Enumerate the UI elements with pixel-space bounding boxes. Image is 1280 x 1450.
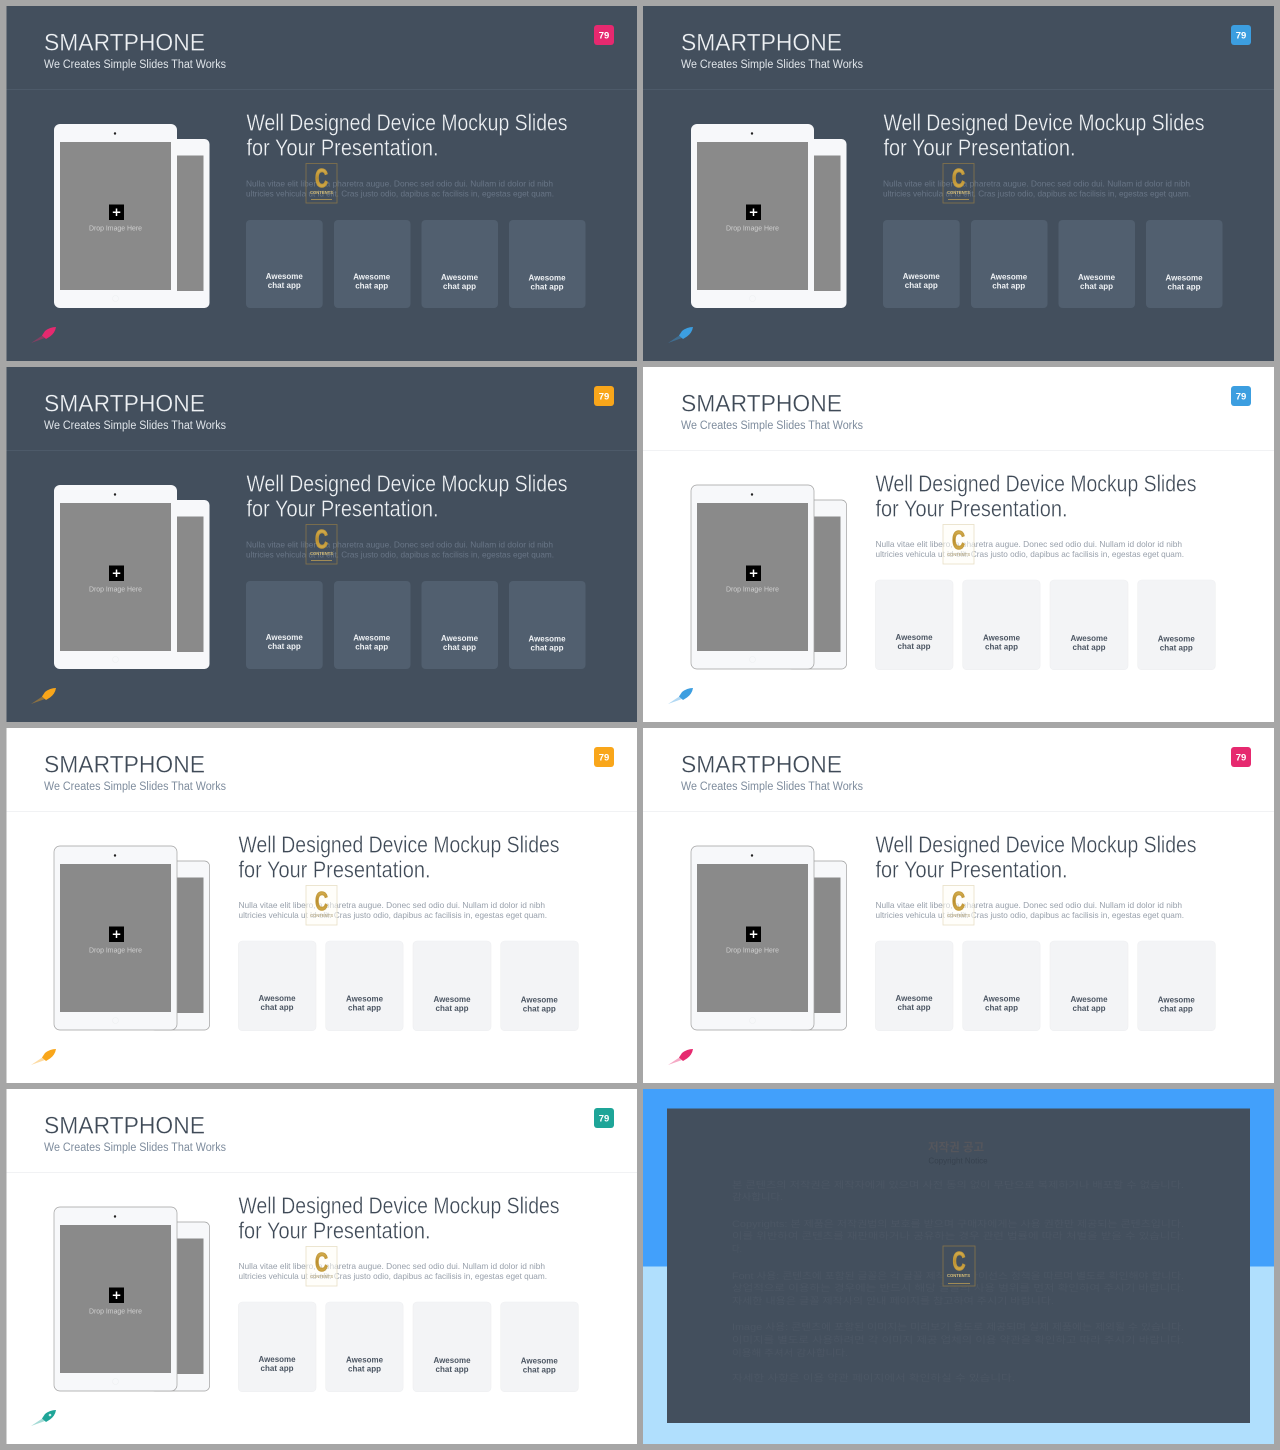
app cards: Awesome — [521, 1355, 558, 1365]
watermark logo: CONTENTS — [310, 913, 333, 918]
app cards: chat app — [436, 1364, 468, 1374]
app cards: Awesome — [434, 1355, 471, 1365]
watermark logo — [943, 1246, 975, 1286]
watermark logo — [943, 163, 974, 203]
app cards: chat app — [530, 642, 564, 652]
slide title: SMARTPHONE — [681, 390, 842, 417]
app cards: Awesome — [990, 272, 1027, 282]
body text: ultricies vehicula ut id elit. Cras justo odio, dapibus ac facilisis in, egestas eget quam. — [876, 549, 1184, 559]
app cards: chat app — [1072, 642, 1106, 652]
watermark logo: CONTENTS — [947, 552, 970, 557]
app cards: chat app — [268, 641, 301, 651]
watermark logo — [306, 1246, 337, 1286]
app cards: chat app — [1160, 642, 1193, 652]
app cards: chat app — [1168, 281, 1200, 291]
panel: dark slide pink — [6, 6, 637, 361]
tablet mockup: Drop Image Here — [89, 948, 142, 954]
panel: light slide teal — [6, 1089, 637, 1444]
panel: dark slide blue — [643, 6, 1274, 361]
body text: ultricies vehicula ut id elit. Cras justo odio, dapibus ac facilisis in, egestas eget quam. — [883, 189, 1191, 199]
app cards: chat app — [985, 1002, 1018, 1012]
heading: Well Designed Device Mockup Slides — [238, 1193, 560, 1219]
slide subtitle: We Creates Simple Slides That Works — [44, 1142, 226, 1154]
app cards: chat app — [523, 1364, 556, 1374]
heading: Well Designed Device Mockup Slides — [246, 110, 568, 136]
notice paragraphs: Image 사용: 콘텐츠에 포함된 이미지는 미리보기 용도로 제공되며 실제 제품에는 제외될 수 있습니다. — [732, 1321, 1184, 1332]
watermark logo — [306, 524, 337, 564]
heading: for Your Presentation. — [238, 1218, 430, 1244]
heading — [238, 1193, 560, 1244]
slide subtitle: We Creates Simple Slides That Works — [681, 59, 863, 71]
icon: rocket — [668, 1049, 693, 1065]
app cards: Awesome — [353, 272, 390, 282]
notice paragraphs: Copyrights: 본 제품은 저작권법의 보호를 받으며 구매자에게는 사용 권한만 제공되는 콘텐츠입니다. — [732, 1218, 1184, 1229]
app cards: chat app — [355, 280, 388, 290]
body text: ultricies vehicula ut id elit. Cras justo odio, dapibus ac facilisis in, egestas eget quam. — [246, 189, 554, 199]
app cards: Awesome — [346, 1354, 383, 1364]
app cards: chat app — [1160, 1003, 1193, 1013]
app cards: Awesome — [1070, 633, 1108, 643]
body text: Nulla vitae elit libero, a pharetra augue. Donec sed odio dui. Nullam id dolor id nibh — [876, 539, 1182, 549]
app cards: Awesome — [434, 994, 471, 1004]
body text: Nulla vitae elit libero, a pharetra augue. Donec sed odio dui. Nullam id dolor id nibh — [238, 900, 545, 910]
app cards: Awesome — [528, 633, 566, 643]
app cards: Awesome — [258, 993, 296, 1003]
body text — [246, 540, 554, 560]
heading — [246, 110, 568, 161]
heading — [884, 110, 1204, 161]
slide subtitle: We Creates Simple Slides That Works — [44, 420, 226, 432]
app cards: Awesome — [266, 632, 303, 642]
page badge — [594, 386, 614, 406]
watermark logo: C — [315, 1247, 328, 1277]
page badge: 79 — [1236, 30, 1246, 42]
app cards: chat app — [898, 641, 930, 651]
watermark logo: C — [315, 163, 328, 193]
app cards: Awesome — [353, 632, 390, 642]
icon: rocket — [31, 1410, 56, 1426]
app cards: chat app — [443, 642, 476, 652]
app cards — [246, 220, 586, 308]
tablet mockup — [54, 1207, 210, 1391]
panel: light slide blue — [643, 367, 1274, 722]
tablet mockup — [54, 846, 210, 1030]
page badge: 79 — [599, 30, 609, 42]
body text: ultricies vehicula ut id elit. Cras justo odio, dapibus ac facilisis in, egestas eget quam. — [246, 550, 554, 560]
heading: Well Designed Device Mockup Slides — [884, 110, 1204, 136]
app cards: Awesome — [1158, 994, 1195, 1004]
watermark logo — [943, 524, 974, 564]
notice paragraphs — [732, 1179, 1184, 1383]
watermark logo: C — [315, 524, 328, 554]
body text: Nulla vitae elit libero, a pharetra augue. Donec sed odio dui. Nullam id dolor id nibh — [246, 540, 553, 550]
tablet mockup: Drop Image Here — [726, 226, 779, 232]
tablet mockup: Drop Image Here — [726, 948, 779, 954]
page badge — [594, 747, 614, 767]
slide title: SMARTPHONE — [44, 29, 205, 56]
heading: Well Designed Device Mockup Slides — [876, 471, 1196, 497]
heading — [238, 832, 560, 883]
notice paragraphs: 자세한 사항은 이용 약관 페이지에서 확인하실 수 있습니다. — [732, 1372, 1015, 1383]
page badge: 79 — [1236, 392, 1246, 402]
notice paragraphs: 이를 위반하여 콘텐츠를 재판매하거나 공유하는 경우 관련 법률에 따라 처벌을 받을 수 있습니다. — [732, 1230, 1184, 1241]
heading — [876, 471, 1196, 522]
heading: for Your Presentation. — [884, 135, 1076, 161]
app cards — [883, 220, 1222, 308]
icon: rocket — [31, 1049, 56, 1065]
app cards: chat app — [1072, 1003, 1106, 1013]
watermark logo: CONTENTS — [310, 1274, 333, 1279]
body text: Nulla vitae elit libero, a pharetra augue. Donec sed odio dui. Nullam id dolor id nibh — [238, 1261, 545, 1271]
slide subtitle: We Creates Simple Slides That Works — [681, 420, 863, 432]
tablet mockup — [54, 124, 210, 308]
heading: Well Designed Device Mockup Slides — [246, 471, 568, 497]
app cards: Awesome — [896, 632, 933, 642]
notice title: 저작권 공고 — [928, 1140, 984, 1154]
slide subtitle: We Creates Simple Slides That Works — [681, 781, 863, 793]
page badge — [1231, 386, 1251, 406]
heading: for Your Presentation. — [876, 857, 1068, 883]
notice paragraphs: 이미지를 별도로 사용하려면 각 이미지 제공 업체의 이용 약관을 확인하고 따라 주시기 바랍니다. — [732, 1334, 1184, 1345]
panel: dark slide orange — [6, 367, 637, 722]
page badge — [1231, 747, 1251, 767]
watermark logo — [306, 163, 337, 203]
slide title: SMARTPHONE — [44, 1112, 205, 1139]
watermark logo: CONTENTS — [947, 190, 970, 195]
page badge: 79 — [599, 392, 609, 402]
icon: rocket — [668, 688, 693, 704]
notice paragraphs: 자세한 내용은 글꼴 제작사의 안내 페이지를 참고하여 주시기 바랍니다. — [732, 1295, 1054, 1306]
app cards: Awesome — [1166, 272, 1203, 282]
app cards: Awesome — [521, 994, 558, 1004]
tablet mockup: Drop Image Here — [89, 586, 142, 594]
page badge: 79 — [599, 1114, 609, 1124]
app cards: Awesome — [258, 1354, 296, 1364]
notice paragraphs: 다. — [732, 1244, 742, 1254]
tablet mockup — [691, 124, 846, 308]
slide title: SMARTPHONE — [44, 390, 205, 417]
app cards: Awesome — [441, 272, 478, 282]
app cards: chat app — [898, 1002, 930, 1012]
app cards: Awesome — [1070, 994, 1108, 1004]
app cards: chat app — [905, 280, 938, 290]
app cards — [238, 1302, 578, 1392]
page badge — [1231, 25, 1251, 45]
app cards: Awesome — [528, 272, 566, 282]
app cards: chat app — [260, 1363, 294, 1373]
app cards: Awesome — [346, 994, 383, 1004]
body text: Nulla vitae elit libero, a pharetra augue. Donec sed odio dui. Nullam id dolor id nibh — [876, 900, 1182, 910]
notice paragraphs: 상업적으로 이용하는 경우에는 반드시 해당 글꼴의 사용 범위를 먼저 확인하여 주시기 바랍니다. — [732, 1282, 1184, 1293]
body text — [238, 900, 547, 920]
slide subtitle: We Creates Simple Slides That Works — [44, 781, 226, 793]
heading: for Your Presentation. — [246, 496, 438, 522]
page badge: 79 — [599, 752, 609, 764]
body text: Nulla vitae elit libero, a pharetra augue. Donec sed odio dui. Nullam id dolor id nibh — [883, 179, 1190, 189]
body text — [876, 900, 1184, 920]
heading — [246, 471, 568, 522]
app cards: chat app — [436, 1003, 468, 1013]
app cards: Awesome — [903, 271, 940, 281]
app cards: Awesome — [441, 633, 478, 643]
body text — [238, 1261, 547, 1281]
app cards — [246, 581, 586, 669]
tablet mockup — [691, 485, 846, 669]
app cards — [238, 941, 578, 1031]
slide title: SMARTPHONE — [681, 29, 842, 56]
heading: for Your Presentation. — [238, 857, 430, 883]
page badge: 79 — [1236, 752, 1246, 764]
tablet mockup — [691, 846, 846, 1030]
page badge — [594, 1108, 614, 1128]
heading — [876, 832, 1196, 883]
notice paragraphs: 본 콘텐츠의 저작권은 제작자에게 있으며 사전 동의 없이 무단으로 복제하거나 배포할 수 없습니다. — [732, 1179, 1184, 1190]
slide title: SMARTPHONE — [44, 751, 205, 778]
heading: Well Designed Device Mockup Slides — [876, 832, 1196, 858]
app cards: chat app — [523, 1003, 556, 1013]
app cards: chat app — [985, 642, 1018, 652]
tablet mockup: Drop Image Here — [89, 1308, 142, 1316]
notice paragraphs: 감사합니다. — [732, 1191, 783, 1202]
heading: for Your Presentation. — [876, 496, 1068, 522]
app cards: chat app — [348, 1002, 381, 1012]
app cards: chat app — [355, 642, 388, 652]
tablet mockup: Drop Image Here — [726, 586, 779, 594]
body text — [883, 179, 1191, 199]
body text: ultricies vehicula ut id elit. Cras justo odio, dapibus ac facilisis in, egestas eget quam. — [238, 1271, 547, 1281]
panel: copyright notice — [643, 1089, 1274, 1444]
watermark logo: CONTENTS — [310, 551, 333, 556]
body text — [876, 539, 1184, 559]
notice paragraphs: Font 사용: 콘텐츠에 포함된 글꼴은 각 글꼴 제작사의 라이선스 정책을 따르며 별도로 확인해야 합니다. — [732, 1270, 1184, 1281]
app cards: Awesome — [266, 271, 303, 281]
app cards: chat app — [268, 280, 301, 290]
watermark logo: C — [952, 886, 965, 916]
watermark logo: C — [952, 163, 965, 193]
notice subtitle: Copyright Notice — [928, 1156, 988, 1166]
watermark logo: CONTENTS — [310, 190, 333, 195]
tablet mockup: Drop Image Here — [89, 226, 142, 232]
watermark logo: CONTENTS — [947, 913, 970, 918]
notice paragraphs: 이용해 주셔서 감사합니다. — [732, 1347, 848, 1358]
app cards: Awesome — [1158, 633, 1195, 643]
watermark logo — [943, 886, 974, 925]
app cards — [875, 580, 1215, 670]
panel: light slide pink — [643, 728, 1274, 1083]
body text: Nulla vitae elit libero, a pharetra augue. Donec sed odio dui. Nullam id dolor id nibh — [246, 179, 553, 189]
body text: ultricies vehicula ut id elit. Cras justo odio, dapibus ac facilisis in, egestas eget quam. — [238, 910, 547, 920]
slide title: SMARTPHONE — [681, 751, 842, 778]
watermark logo — [306, 886, 337, 925]
app cards: chat app — [348, 1364, 381, 1374]
app cards: chat app — [530, 281, 564, 291]
app cards: chat app — [1080, 281, 1113, 291]
body text — [246, 179, 554, 199]
page badge — [594, 25, 614, 45]
slide subtitle: We Creates Simple Slides That Works — [44, 59, 226, 71]
app cards — [875, 941, 1215, 1031]
heading: Well Designed Device Mockup Slides — [238, 832, 560, 858]
heading: for Your Presentation. — [246, 135, 438, 161]
app cards: chat app — [992, 280, 1025, 290]
watermark logo: C — [952, 525, 965, 555]
app cards: Awesome — [983, 632, 1020, 642]
app cards: Awesome — [983, 994, 1020, 1004]
icon: rocket — [31, 327, 56, 343]
tablet mockup — [54, 485, 210, 669]
body text: ultricies vehicula ut id elit. Cras justo odio, dapibus ac facilisis in, egestas eget quam. — [876, 910, 1184, 920]
panel: light slide orange — [6, 728, 637, 1083]
icon: rocket — [668, 327, 693, 343]
icon: rocket — [31, 688, 56, 704]
watermark logo: C — [952, 1246, 966, 1276]
app cards: Awesome — [1078, 272, 1115, 282]
watermark logo: C — [315, 886, 328, 916]
app cards: chat app — [260, 1002, 294, 1012]
watermark logo: CONTENTS — [947, 1273, 970, 1278]
app cards: chat app — [443, 281, 476, 291]
app cards: Awesome — [896, 993, 933, 1003]
